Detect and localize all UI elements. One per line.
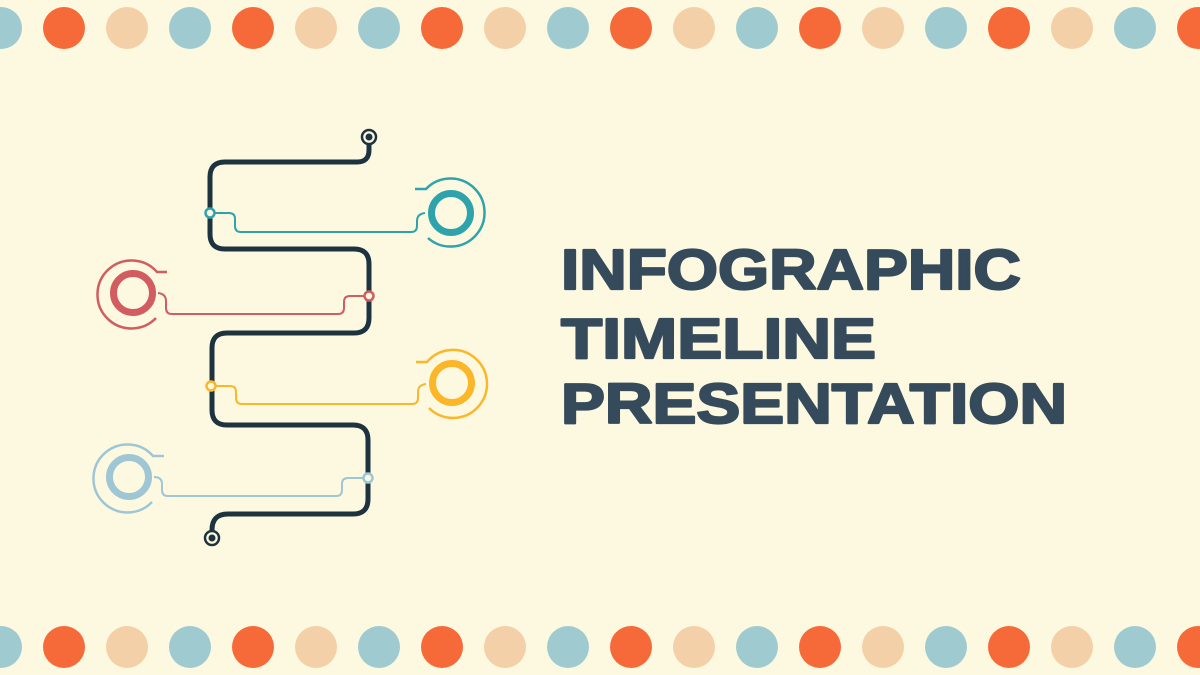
title: INFOGRAPHIC — [561, 238, 1021, 302]
main serpentine line — [210, 143, 369, 532]
milestone 2: red — [97, 260, 373, 328]
top dot border — [0, 7, 1200, 49]
end endpoint — [205, 531, 219, 545]
milestone 3: yellow — [206, 350, 487, 418]
start endpoint — [362, 130, 376, 144]
title — [561, 238, 1067, 436]
title: PRESENTATION — [561, 372, 1067, 436]
title: TIMELINE — [561, 307, 876, 371]
milestone 4: light blue — [93, 444, 372, 512]
bottom dot border — [0, 626, 1200, 668]
milestone 1: teal — [206, 179, 485, 247]
timeline — [93, 130, 487, 545]
